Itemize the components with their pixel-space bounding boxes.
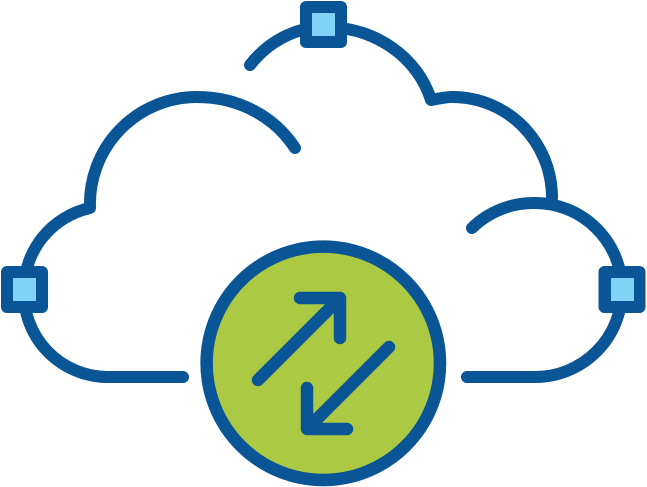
- cloud outline: [24, 27, 622, 377]
- arrow: up right: [258, 298, 340, 380]
- node: top: [300, 1, 347, 48]
- node: right: [598, 266, 646, 313]
- arrow: down left: [307, 347, 389, 429]
- node: left: [1, 266, 48, 313]
- transfer badge: [207, 247, 440, 480]
